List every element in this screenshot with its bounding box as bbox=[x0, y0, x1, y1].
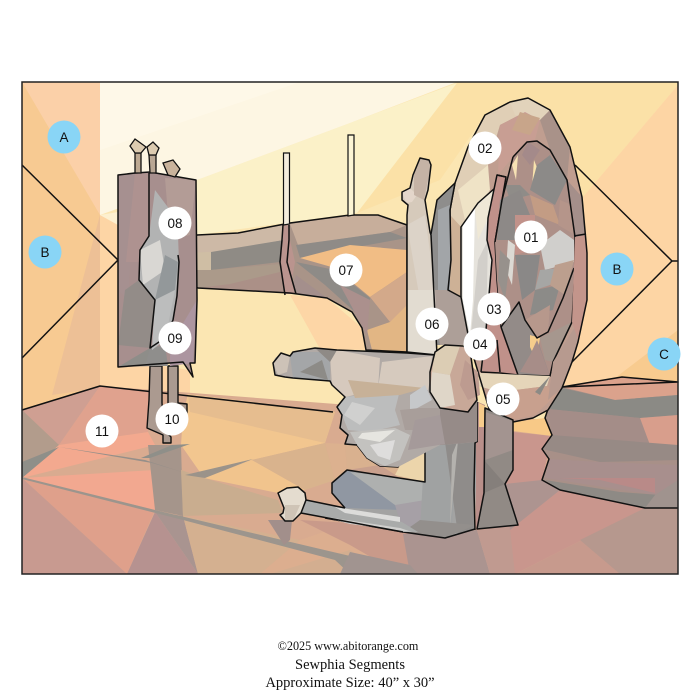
label B right bbox=[600, 252, 634, 286]
label 06 bbox=[416, 308, 448, 340]
label 08: 08 bbox=[167, 216, 183, 231]
footer text bbox=[265, 639, 435, 691]
label 11: 11 bbox=[95, 424, 109, 439]
label 01 bbox=[514, 220, 548, 254]
frame bbox=[22, 82, 678, 574]
label 06: 06 bbox=[424, 317, 440, 332]
back plate bbox=[431, 183, 470, 345]
label 11 bbox=[86, 414, 118, 448]
back floor block bbox=[542, 377, 678, 508]
label 03: 03 bbox=[486, 302, 502, 317]
gap below housing bbox=[345, 444, 425, 482]
panel lines bbox=[22, 165, 678, 412]
label 05: 05 bbox=[495, 392, 511, 407]
quilt illustration bbox=[22, 82, 678, 574]
label 01: 01 bbox=[523, 230, 539, 245]
rods bbox=[284, 135, 354, 225]
top knobs bbox=[130, 139, 180, 177]
housing bbox=[273, 345, 478, 530]
wheel interior bbox=[481, 141, 575, 376]
label 04: 04 bbox=[472, 337, 488, 352]
label 04 bbox=[464, 328, 496, 360]
label 10 bbox=[156, 402, 188, 436]
label A: A bbox=[59, 130, 69, 145]
label B right: B bbox=[612, 262, 622, 277]
project name: Sewphia Segments bbox=[295, 657, 405, 673]
label 05 bbox=[486, 382, 520, 416]
handle bar bbox=[278, 487, 418, 532]
label 02 bbox=[468, 132, 502, 164]
upright column bbox=[402, 158, 437, 355]
label 03 bbox=[478, 292, 510, 326]
front leg bbox=[476, 402, 518, 530]
label 09: 09 bbox=[167, 331, 183, 346]
label 10: 10 bbox=[164, 412, 180, 427]
floor bbox=[22, 386, 678, 574]
lettered labels bbox=[28, 120, 680, 370]
wall background bbox=[22, 82, 678, 422]
numbered labels bbox=[86, 132, 548, 448]
needle post legs bbox=[147, 366, 187, 443]
foot base bbox=[325, 400, 478, 538]
label C: C bbox=[659, 347, 669, 362]
needle post bbox=[118, 172, 197, 377]
label C bbox=[648, 338, 680, 370]
label 07 bbox=[330, 254, 362, 286]
arm bbox=[177, 215, 407, 352]
rim strip bbox=[481, 175, 518, 375]
label 09 bbox=[158, 322, 192, 354]
hub bbox=[430, 345, 480, 412]
approximate size: Approximate Size: 40” x 30” bbox=[265, 675, 435, 691]
wheel lower band bbox=[478, 235, 587, 420]
label B left: B bbox=[40, 245, 50, 260]
label B left bbox=[28, 236, 62, 268]
label A bbox=[48, 120, 80, 154]
label 02: 02 bbox=[477, 141, 493, 156]
label 07: 07 bbox=[338, 263, 354, 278]
label 08 bbox=[158, 206, 192, 240]
flywheel bbox=[449, 98, 587, 422]
white panel bbox=[461, 188, 495, 345]
copyright: ©2025 www.abitorange.com bbox=[278, 639, 419, 653]
